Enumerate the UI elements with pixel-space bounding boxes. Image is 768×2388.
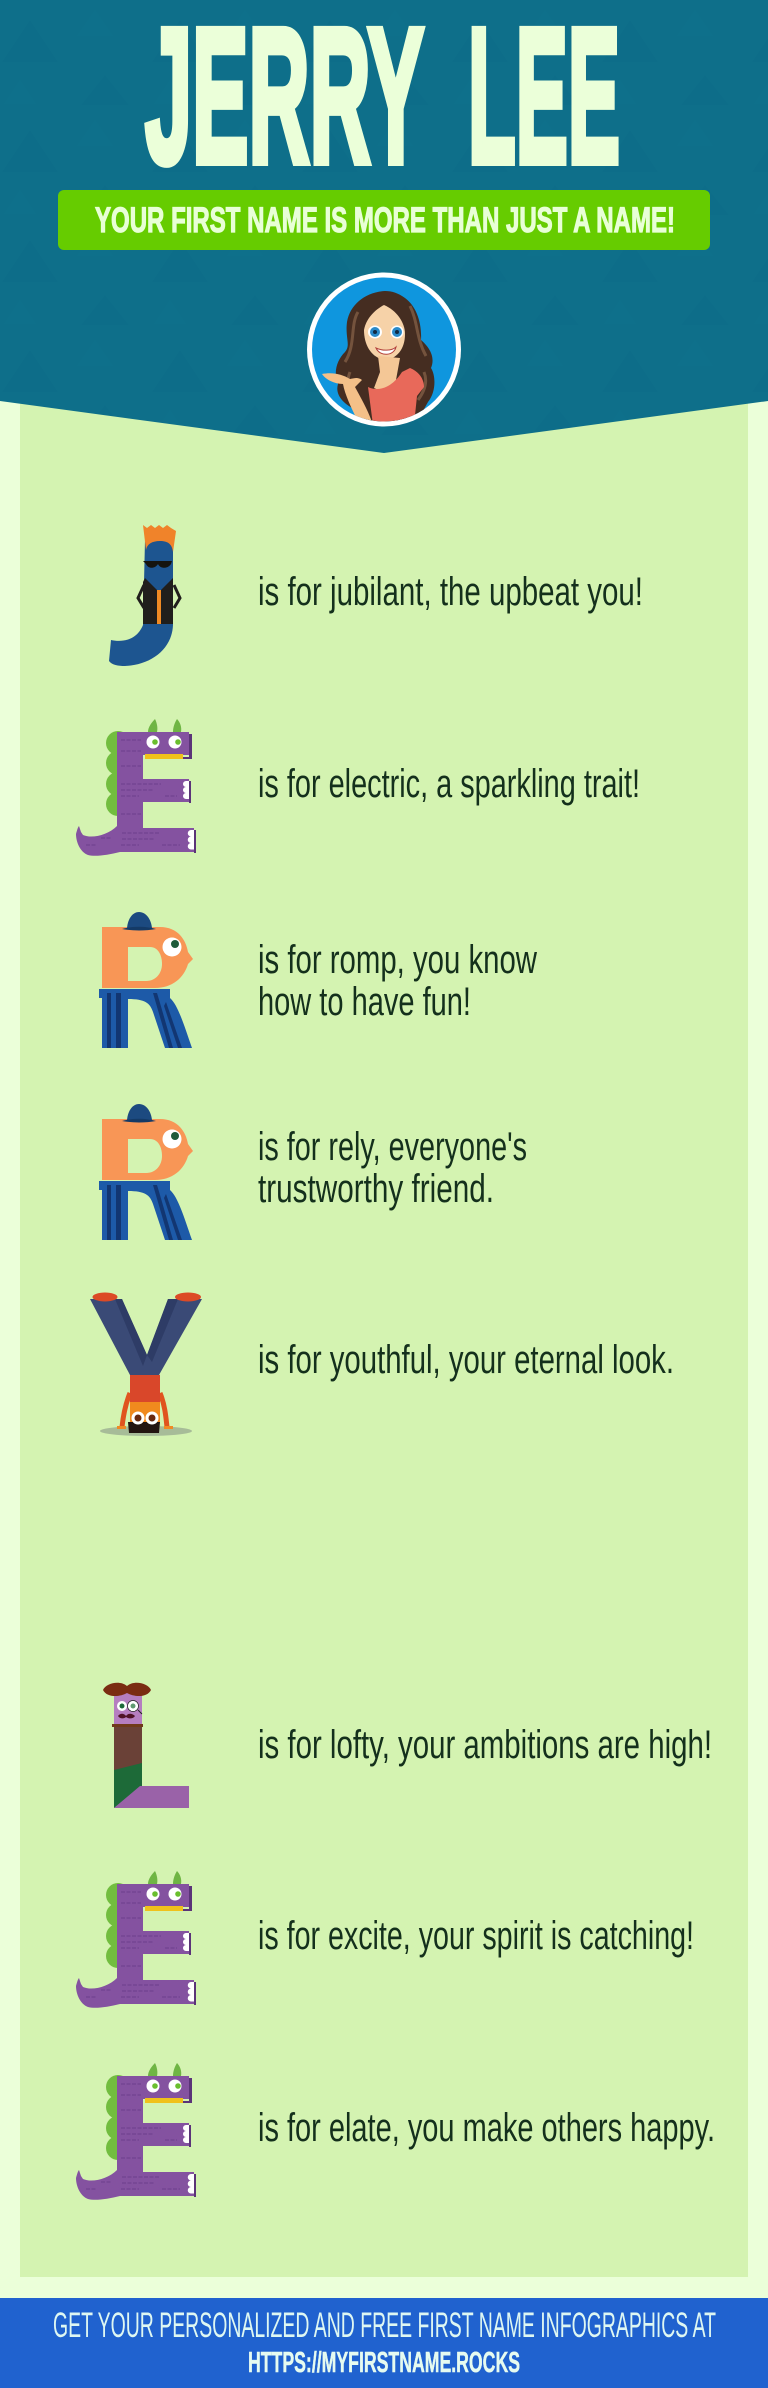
row: letter E (electric)	[76, 719, 640, 856]
footer url: HTTPS://MYFIRSTNAME.ROCKS	[248, 2347, 520, 2379]
icon: letter E creature	[76, 719, 196, 856]
icon: letter J character	[109, 525, 180, 666]
row: letter J	[109, 525, 643, 666]
text: R rely: is for rely, everyone's	[258, 1125, 527, 1169]
row: letter E (excite)	[76, 1871, 694, 2008]
icon: third letter E creature	[76, 2063, 196, 2200]
row: letter L	[103, 1683, 712, 1808]
row: letter R (romp)	[99, 912, 537, 1048]
subtitle bar	[58, 190, 710, 250]
text: R rely: trustworthy friend.	[258, 1167, 494, 1211]
text: R romp: is for romp, you know	[258, 938, 537, 982]
text: J: is for jubilant, the upbeat you!	[258, 570, 643, 614]
icon: second letter R character	[99, 1104, 193, 1240]
header banner	[0, 0, 768, 453]
avatar: smiling woman in circle	[307, 272, 461, 426]
icon: letter Y handstand character	[90, 1292, 202, 1436]
icon: second letter E creature	[76, 1871, 196, 2008]
text: R romp	[258, 938, 537, 1024]
text: R rely	[258, 1125, 527, 1211]
row: letter Y	[90, 1292, 674, 1436]
text: R romp: how to have fun!	[258, 980, 471, 1024]
row: letter R (rely)	[99, 1104, 527, 1240]
row: letter E (elate)	[76, 2063, 715, 2200]
icon: letter L gentleman character	[103, 1683, 189, 1808]
footer band	[0, 2298, 768, 2388]
icon: letter R character	[99, 912, 193, 1048]
content panel	[20, 380, 748, 2277]
